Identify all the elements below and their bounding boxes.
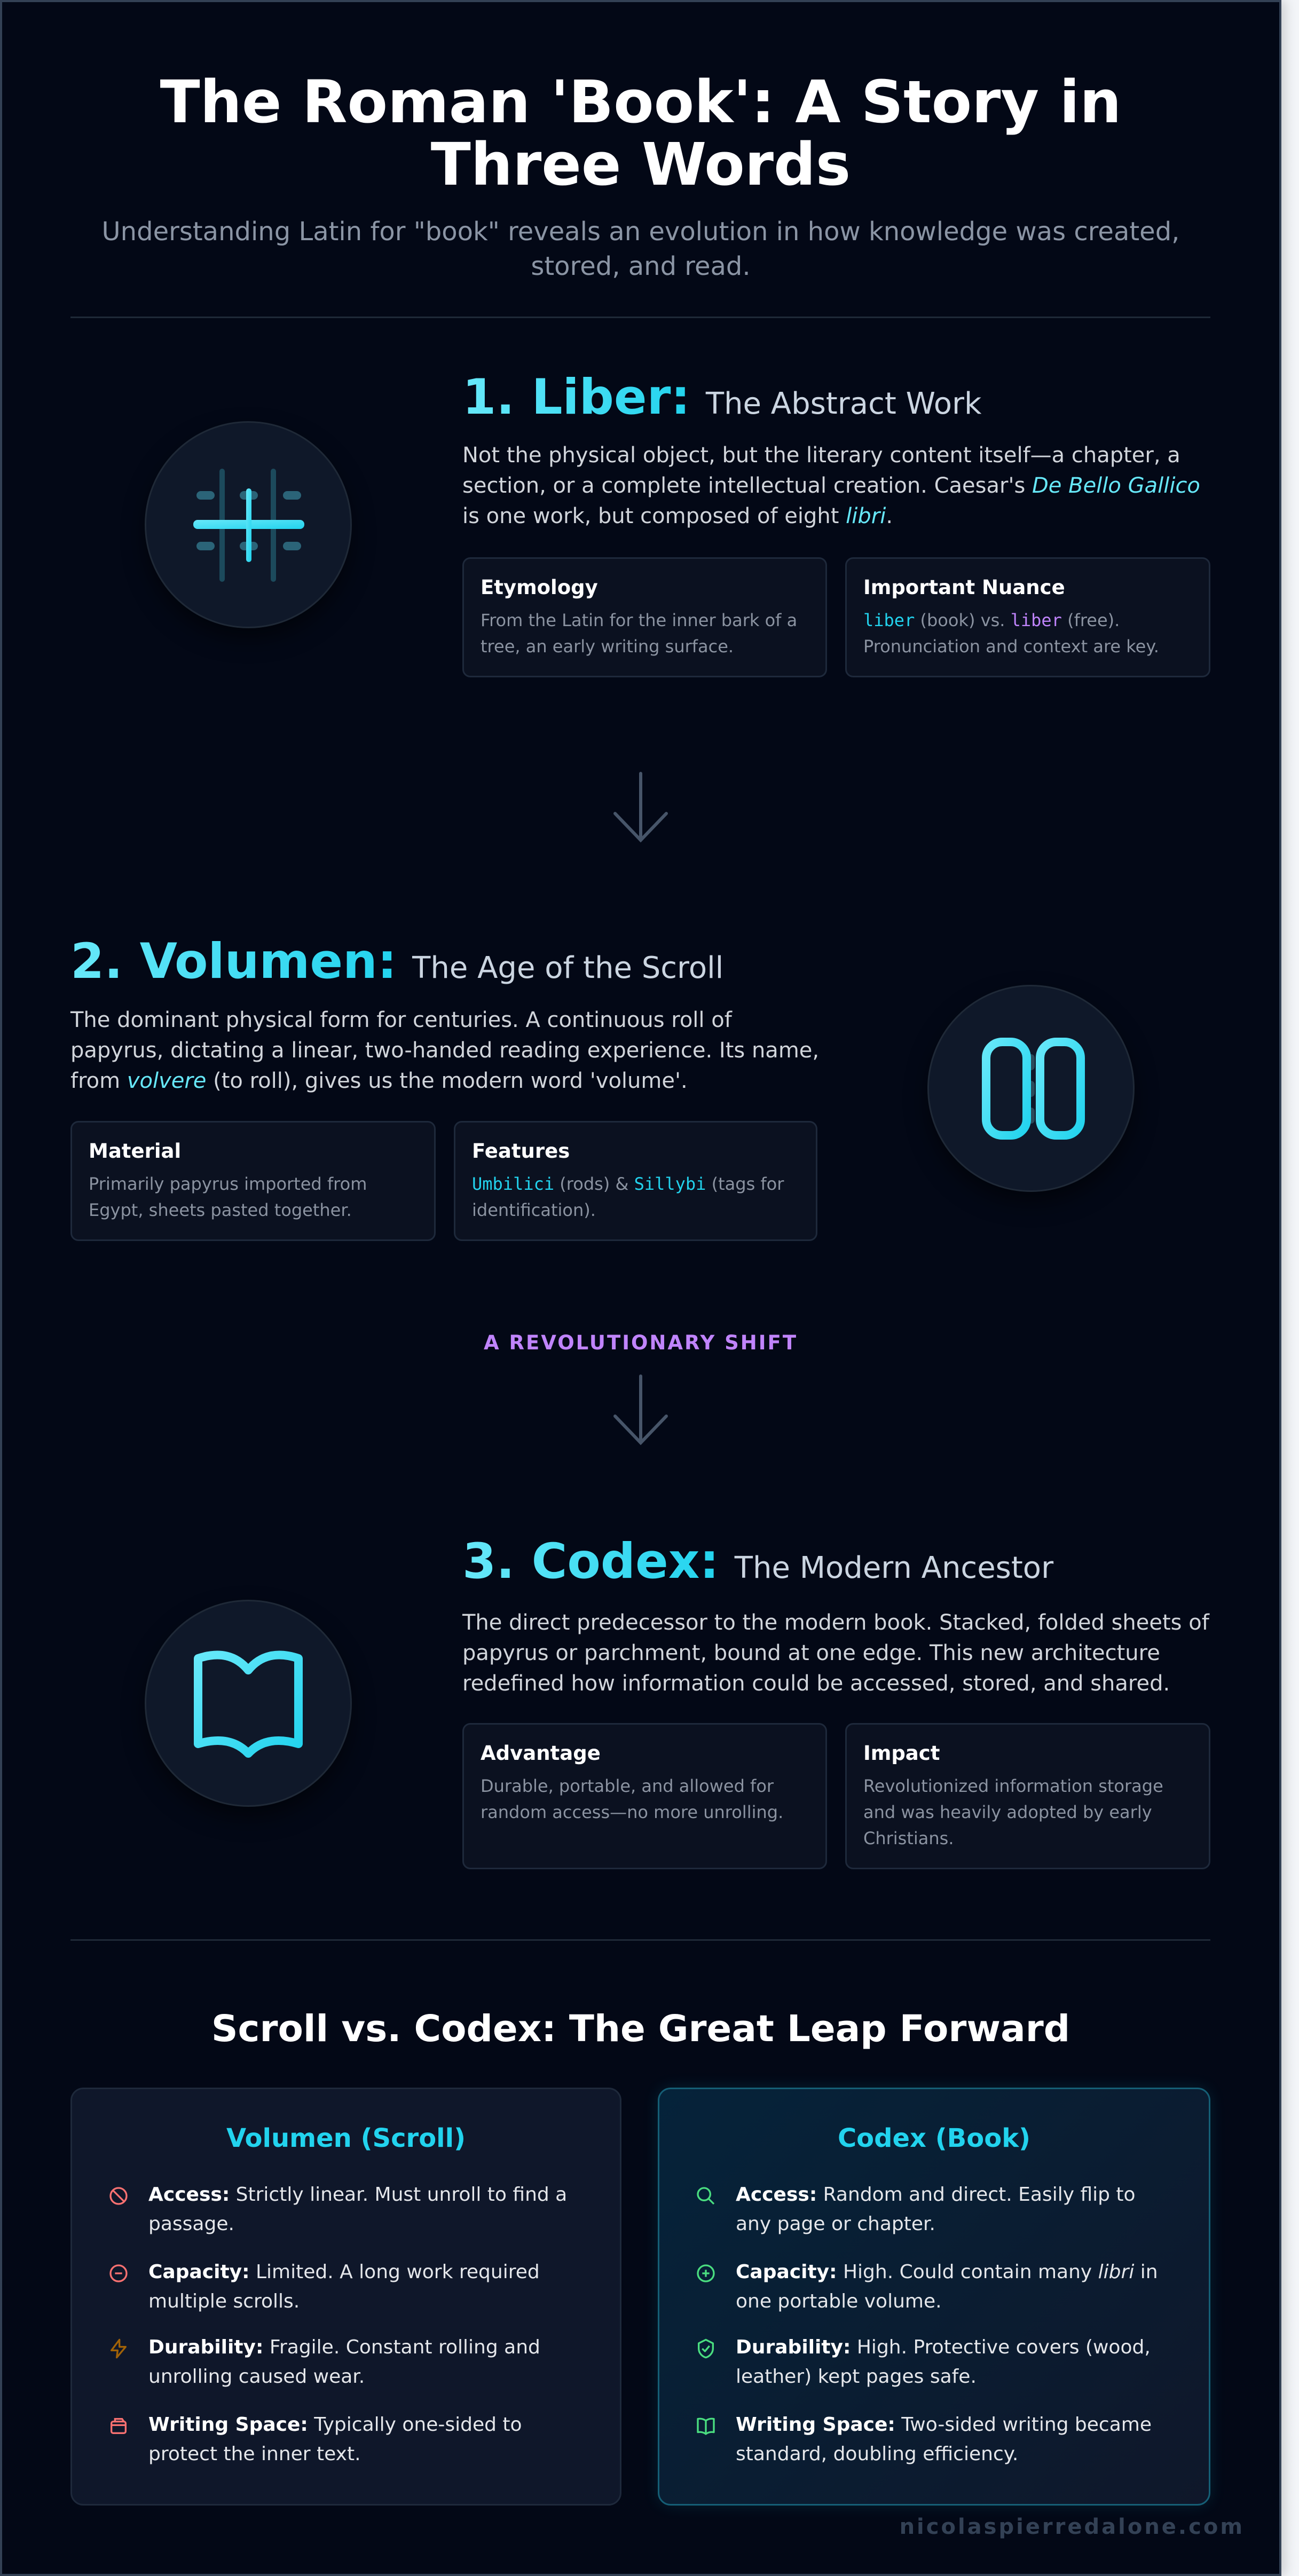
item: durability: Durability: Fragile. Constant rolling and bbox=[148, 2336, 540, 2358]
text block bbox=[462, 1610, 1210, 1696]
card: etymology: Etymology bbox=[481, 576, 598, 599]
card: advantage: Advantage bbox=[481, 1742, 601, 1765]
panel: codex book bbox=[658, 2088, 1210, 2506]
text block: section, or a complete intellectual creation. Caesar's De Bello Gallico bbox=[462, 473, 1200, 498]
card: advantage: random access—no more unrolling. bbox=[481, 1802, 783, 1822]
comparison heading: Scroll vs. Codex: The Great Leap Forward bbox=[211, 2008, 1070, 2050]
item: durability: Durability: High. Protective covers (wood, bbox=[736, 2336, 1151, 2358]
item: capacity bbox=[697, 2261, 1158, 2312]
item: writing space: Writing Space: Two-sided writing became bbox=[736, 2414, 1152, 2436]
title: The Roman 'Book': A Story in bbox=[160, 68, 1121, 136]
card: impact: Christians. bbox=[863, 1828, 954, 1848]
card: impact: and was heavily adopted by early bbox=[863, 1802, 1152, 1822]
arrow bbox=[613, 772, 668, 842]
item: access bbox=[697, 2184, 1136, 2235]
section 1: liber bbox=[145, 369, 1210, 677]
item: capacity: Capacity: Limited. A long work required bbox=[148, 2261, 540, 2283]
card: impact bbox=[845, 1723, 1210, 1869]
card: features: Umbilici (rods) & Sillybi (tags for bbox=[472, 1174, 784, 1194]
panel title: Volumen (Scroll) bbox=[226, 2123, 466, 2153]
item: capacity bbox=[109, 2261, 540, 2312]
panel: volumen scroll bbox=[70, 2088, 621, 2506]
item: capacity: one portable volume. bbox=[736, 2290, 942, 2312]
text block: papyrus, dictating a linear, two-handed reading experience. Its name, bbox=[70, 1038, 819, 1063]
item: capacity: multiple scrolls. bbox=[148, 2290, 300, 2312]
card: material: Egypt, sheets pasted together. bbox=[89, 1200, 352, 1220]
text block: Not the physical object, but the literary content itself—a chapter, a bbox=[462, 443, 1180, 468]
card: material: Material bbox=[89, 1140, 181, 1163]
item: access bbox=[109, 2184, 567, 2235]
item: durability bbox=[698, 2336, 1151, 2388]
card: advantage bbox=[462, 1723, 827, 1869]
subtitle: stored, and read. bbox=[531, 251, 751, 281]
item: durability: unrolling caused wear. bbox=[148, 2366, 365, 2388]
icon: scroll bbox=[927, 985, 1135, 1192]
section 2: volumen bbox=[70, 934, 1135, 1241]
icon: open book bbox=[145, 1600, 352, 1807]
heading: 1. Liber: The Abstract Work bbox=[462, 369, 981, 425]
card: features: identification). bbox=[472, 1200, 596, 1220]
item: capacity: Capacity: High. Could contain many libri in bbox=[736, 2261, 1158, 2283]
text block bbox=[462, 443, 1200, 528]
item: access: any page or chapter. bbox=[736, 2213, 935, 2235]
card: features bbox=[454, 1121, 817, 1241]
card: impact: Revolutionized information storage bbox=[863, 1776, 1163, 1796]
text block: papyrus or parchment, bound at one edge. This new architecture bbox=[462, 1641, 1160, 1665]
card: features: Features bbox=[472, 1140, 570, 1163]
card: advantage: Durable, portable, and allowed for bbox=[481, 1776, 774, 1796]
text block: redefined how information could be accessed, stored, and shared. bbox=[462, 1671, 1170, 1696]
subtitle bbox=[102, 217, 1179, 281]
icon: liber grid bbox=[145, 421, 352, 628]
section 3: codex bbox=[145, 1534, 1210, 1869]
item: access: Access: Strictly linear. Must unroll to find a bbox=[148, 2184, 567, 2206]
arrow bbox=[613, 1374, 668, 1445]
item: durability bbox=[110, 2336, 540, 2388]
item: access: passage. bbox=[148, 2213, 234, 2235]
title: Three Words bbox=[431, 130, 851, 199]
text block: is one work, but composed of eight libri. bbox=[462, 504, 893, 528]
card: impact: Impact bbox=[863, 1742, 940, 1765]
card: nuance bbox=[845, 557, 1210, 677]
item: writing space: Writing Space: Typically one-sided to bbox=[148, 2414, 522, 2436]
item: access: Access: Random and direct. Easily flip to bbox=[736, 2184, 1136, 2206]
label: revolutionary shift: A REVOLUTIONARY SHIFT bbox=[484, 1331, 798, 1354]
card: etymology: From the Latin for the inner bark of a bbox=[481, 610, 797, 630]
heading: 3. Codex: The Modern Ancestor bbox=[462, 1534, 1053, 1590]
panel title: Codex (Book) bbox=[838, 2123, 1030, 2153]
item: writing space bbox=[111, 2414, 522, 2465]
item: writing space: standard, doubling efficiency. bbox=[736, 2443, 1018, 2465]
card: nuance: Important Nuance bbox=[863, 576, 1065, 599]
text block: The dominant physical form for centuries. A continuous roll of bbox=[70, 1008, 732, 1032]
footer credit: nicolaspierredalone.com bbox=[900, 2515, 1245, 2539]
text block: The direct predecessor to the modern book. Stacked, folded sheets of bbox=[462, 1610, 1209, 1635]
text block bbox=[70, 1008, 819, 1093]
item: writing space: protect the inner text. bbox=[148, 2443, 361, 2465]
card: nuance: liber (book) vs. liber (free). bbox=[863, 610, 1120, 630]
card: etymology: tree, an early writing surface. bbox=[481, 636, 734, 657]
text block: from volvere (to roll), gives us the modern word 'volume'. bbox=[70, 1069, 688, 1093]
item: writing space bbox=[697, 2414, 1152, 2465]
item: durability: leather) kept pages safe. bbox=[736, 2366, 977, 2388]
card: nuance: Pronunciation and context are key. bbox=[863, 636, 1159, 657]
heading: 2. Volumen: The Age of the Scroll bbox=[70, 934, 723, 990]
card: material bbox=[70, 1121, 436, 1241]
card: etymology bbox=[462, 557, 827, 677]
card: material: Primarily papyrus imported from bbox=[89, 1174, 367, 1194]
subtitle: Understanding Latin for "book" reveals an evolution in how knowledge was created, bbox=[102, 217, 1179, 247]
title bbox=[160, 68, 1121, 199]
